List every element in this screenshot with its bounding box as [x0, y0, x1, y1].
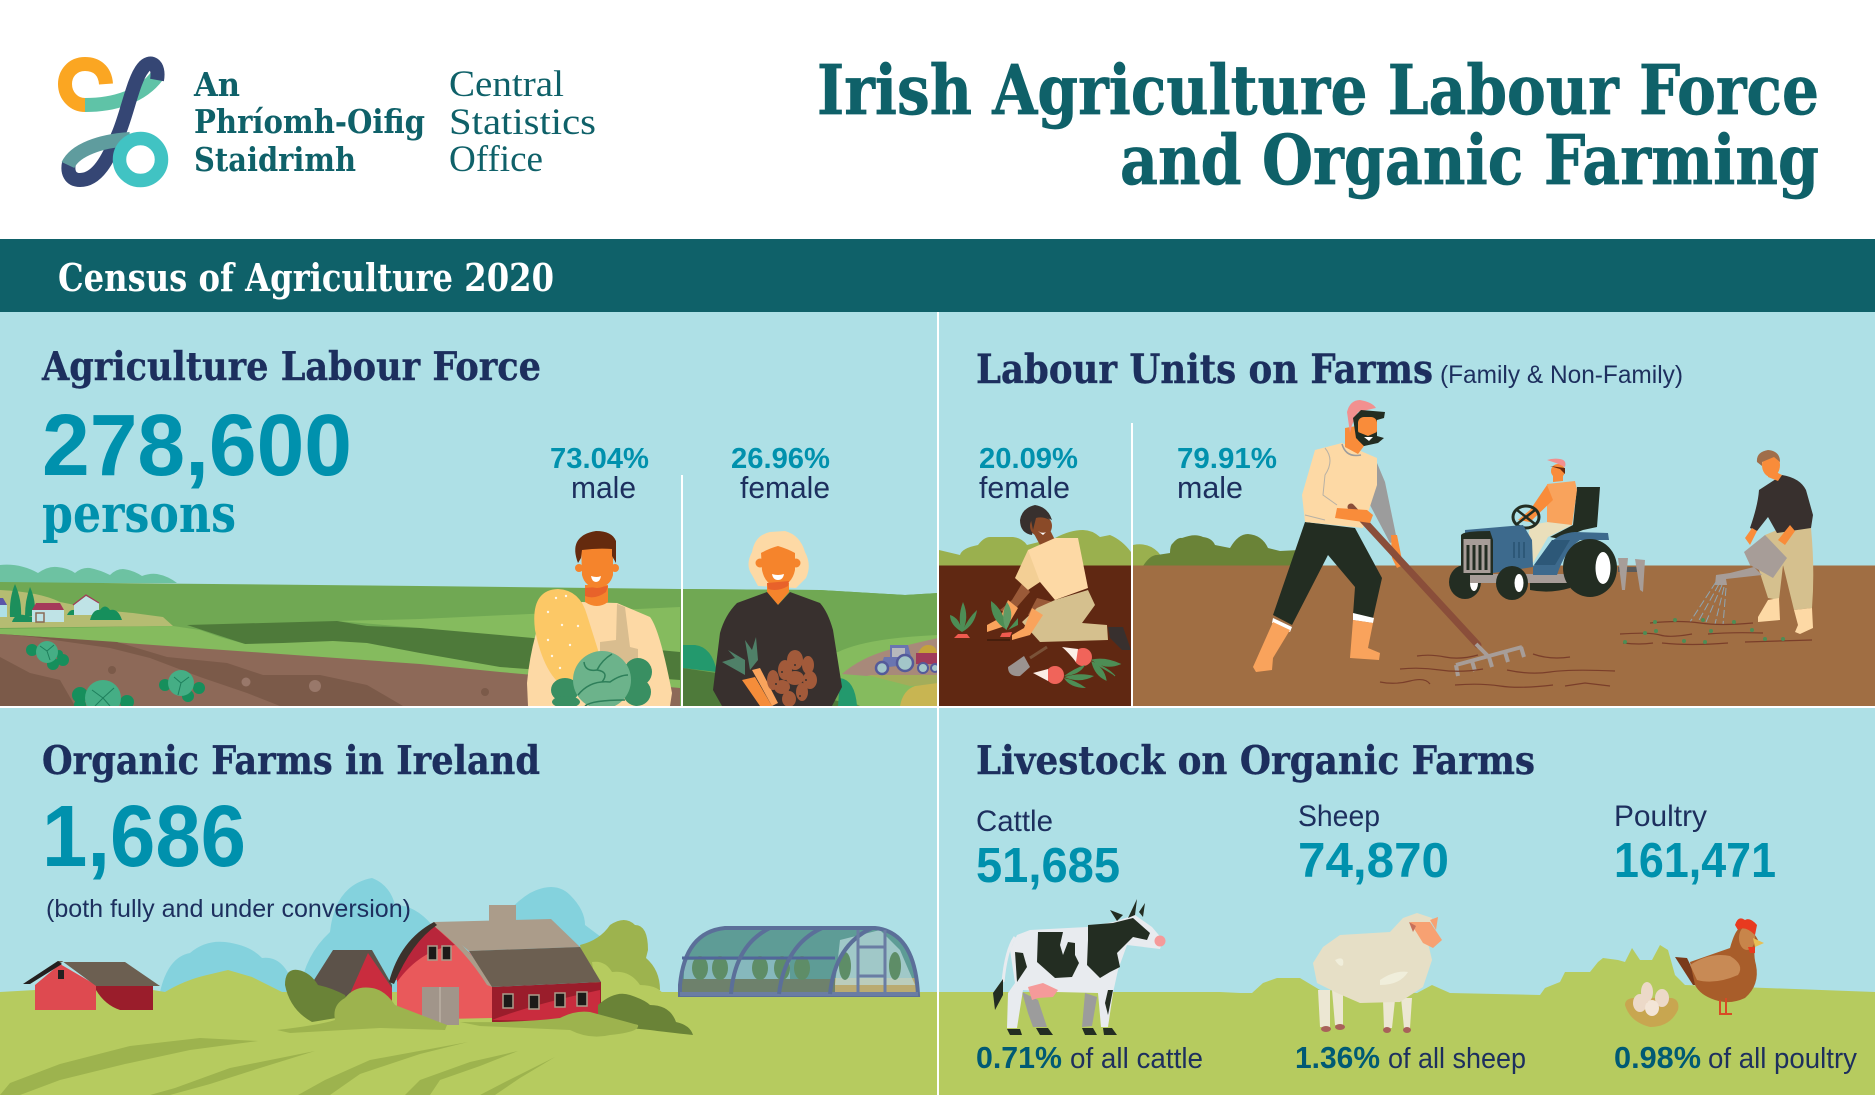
illustration: female farmer — [713, 531, 842, 707]
stat: cattle: 51,685 — [976, 839, 1120, 893]
far arm — [1370, 463, 1397, 543]
female share: female — [740, 470, 830, 505]
icon: main barn — [389, 905, 601, 1025]
male share: male — [1177, 470, 1243, 505]
icon: sheep — [1313, 913, 1442, 1033]
big number: 278,600 — [42, 397, 352, 494]
panel: livestock on organic farms — [939, 708, 1875, 1095]
stat: poultry: of all poultry — [1708, 1043, 1857, 1075]
stat: cattle: 0.71% — [976, 1040, 1062, 1075]
illustration: tractor with driver — [1449, 459, 1645, 600]
female share — [979, 443, 1078, 505]
icon: trowel and radishes — [1008, 647, 1120, 688]
right part of field — [683, 589, 938, 706]
logo text: English name: Statistics — [449, 102, 596, 143]
stat: sheep: 74,870 — [1298, 834, 1449, 888]
icon: cabbages — [26, 641, 205, 716]
icon: polytunnel greenhouse — [680, 928, 918, 995]
logo text: English name: Office — [449, 139, 543, 180]
logo text: Irish name: Phríomh-Oifig — [194, 102, 425, 141]
banner: Census of Agriculture 2020 — [0, 239, 1875, 312]
stat: poultry — [1614, 800, 1857, 1075]
heading: Organic Farms in Ireland — [42, 738, 540, 784]
bushes behind barn — [580, 920, 666, 1020]
male share — [550, 443, 649, 505]
stat: sheep: Sheep — [1298, 800, 1380, 833]
persons label: persons — [42, 484, 236, 545]
heading: Labour Units on Farms — [976, 346, 1433, 393]
heading: Livestock on Organic Farms — [976, 738, 1535, 784]
stat: poultry: 0.98% — [1614, 1040, 1701, 1075]
illustration: kneeling woman — [950, 505, 1131, 650]
male share: 73.04% — [550, 443, 649, 475]
male share — [1177, 443, 1277, 505]
icon: knot emblem — [65, 64, 162, 180]
divider lines — [0, 706, 1875, 708]
icon: tractor in field — [876, 645, 939, 674]
logo text: Irish name: An — [193, 65, 240, 104]
logo text: English name — [449, 64, 596, 180]
furrows and seedlings — [1380, 618, 1812, 687]
heading: Agriculture Labour Force — [41, 344, 541, 390]
illustration: man with rake — [1253, 400, 1524, 676]
logo text: English name: Central — [449, 64, 564, 105]
panel: labour units on farms — [938, 312, 1875, 706]
logo text: Irish name: Staidrimh — [194, 140, 356, 179]
stat: poultry: Poultry — [1614, 800, 1707, 833]
female share — [731, 443, 830, 505]
divider — [681, 475, 683, 706]
stat: cattle: of all cattle — [1070, 1043, 1203, 1075]
male share: 79.91% — [1177, 443, 1277, 475]
rake — [1351, 507, 1478, 645]
icon: hen — [1675, 918, 1764, 1014]
ground — [0, 970, 937, 1095]
logo: Central Statistics Office — [65, 64, 596, 180]
head — [1345, 425, 1367, 454]
scene: bushes and soil — [939, 423, 1875, 706]
scene: clouds — [160, 878, 605, 992]
sweater — [1302, 443, 1377, 528]
logo text: Irish name — [193, 65, 425, 179]
field rows — [0, 1038, 555, 1095]
foreground bushes — [277, 987, 693, 1037]
stat: sheep: 1.36% — [1295, 1040, 1380, 1075]
icon: village — [0, 584, 122, 622]
stat: cattle: Cattle — [976, 805, 1053, 838]
big number: 1,686 — [42, 788, 246, 885]
stat: sheep — [1295, 800, 1526, 1075]
banner: Census of Agriculture 2020: Census of Agriculture 2020 — [58, 255, 554, 300]
female share: 26.96% — [731, 443, 830, 475]
illustration: male farmer — [527, 531, 672, 709]
icon: rear barn — [314, 950, 392, 1005]
icon: cow — [993, 899, 1166, 1035]
landscape: fields — [0, 565, 938, 706]
ground — [939, 945, 1875, 1095]
panel: agriculture labour force — [0, 312, 939, 716]
female share: female — [979, 470, 1070, 505]
note: (both fully and under conversion) — [46, 895, 411, 923]
stat: cattle — [976, 805, 1203, 1075]
panel: organic farms in Ireland — [0, 708, 937, 1095]
male share: male — [571, 470, 636, 505]
stat: sheep: of all sheep — [1388, 1043, 1526, 1075]
title — [817, 51, 1819, 201]
heading: (Family & Non-Family) — [1440, 361, 1683, 389]
icon: nest with eggs — [1625, 982, 1678, 1027]
female share: 20.09% — [979, 443, 1078, 475]
bush behind farm — [285, 970, 354, 1022]
stat: poultry: 161,471 — [1614, 834, 1776, 888]
illustration: man with watering can — [1690, 450, 1813, 634]
icon: small barn — [23, 961, 160, 1010]
trousers — [1273, 522, 1382, 625]
